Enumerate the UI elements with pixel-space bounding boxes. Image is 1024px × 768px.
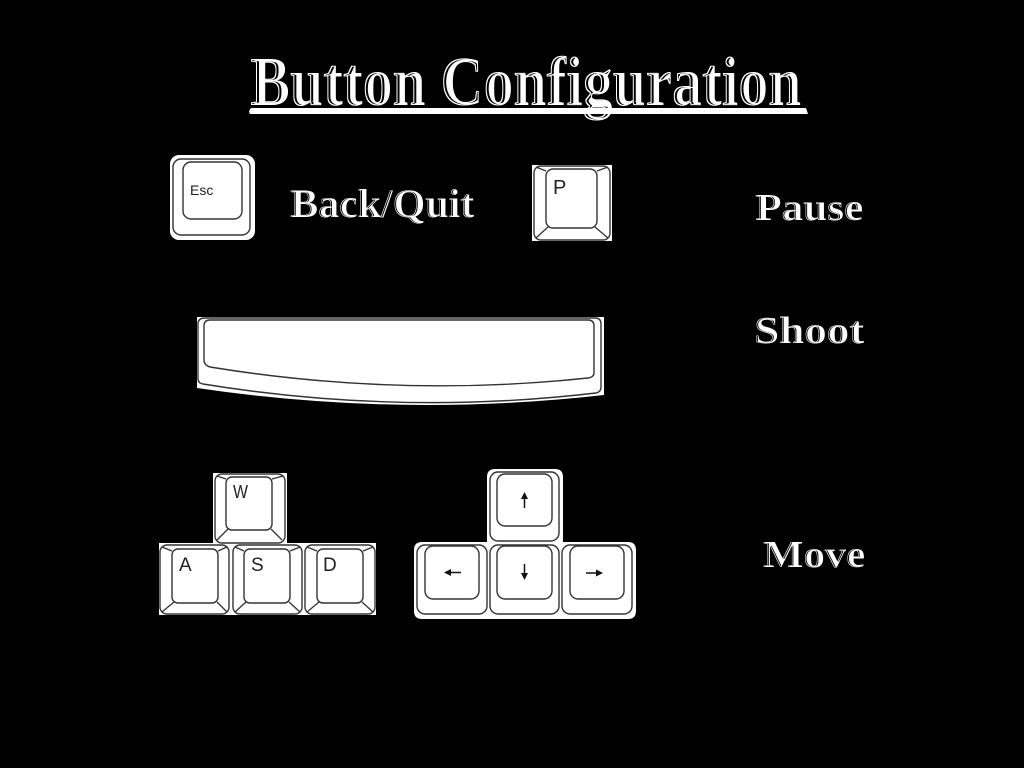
key: space bar (197, 317, 604, 405)
key: right arrow (562, 545, 632, 614)
label: Shoot: Shoot (754, 310, 864, 352)
key: W (215, 474, 285, 543)
key: D (305, 545, 375, 614)
key: Esc (170, 155, 255, 240)
title: Button Configuration (250, 44, 801, 121)
label: Move: Move (763, 534, 865, 576)
title underline (249, 108, 808, 114)
key: Esc: Esc (190, 182, 213, 198)
key: S: S (251, 555, 264, 576)
key group: WASD (159, 473, 376, 615)
key: down arrow (490, 545, 559, 614)
key: S (233, 545, 302, 614)
key: left arrow (417, 545, 487, 614)
key: up arrow (490, 472, 559, 541)
label: Pause: Pause (755, 187, 863, 229)
key: P (532, 165, 612, 241)
key: A (160, 545, 229, 614)
key: W: W (233, 482, 248, 502)
key group: arrow keys (414, 469, 636, 619)
key: A: A (179, 555, 192, 576)
key: D: D (323, 555, 337, 576)
label: Back/Quit: Back/Quit (290, 181, 475, 226)
key: P: P (553, 177, 566, 199)
